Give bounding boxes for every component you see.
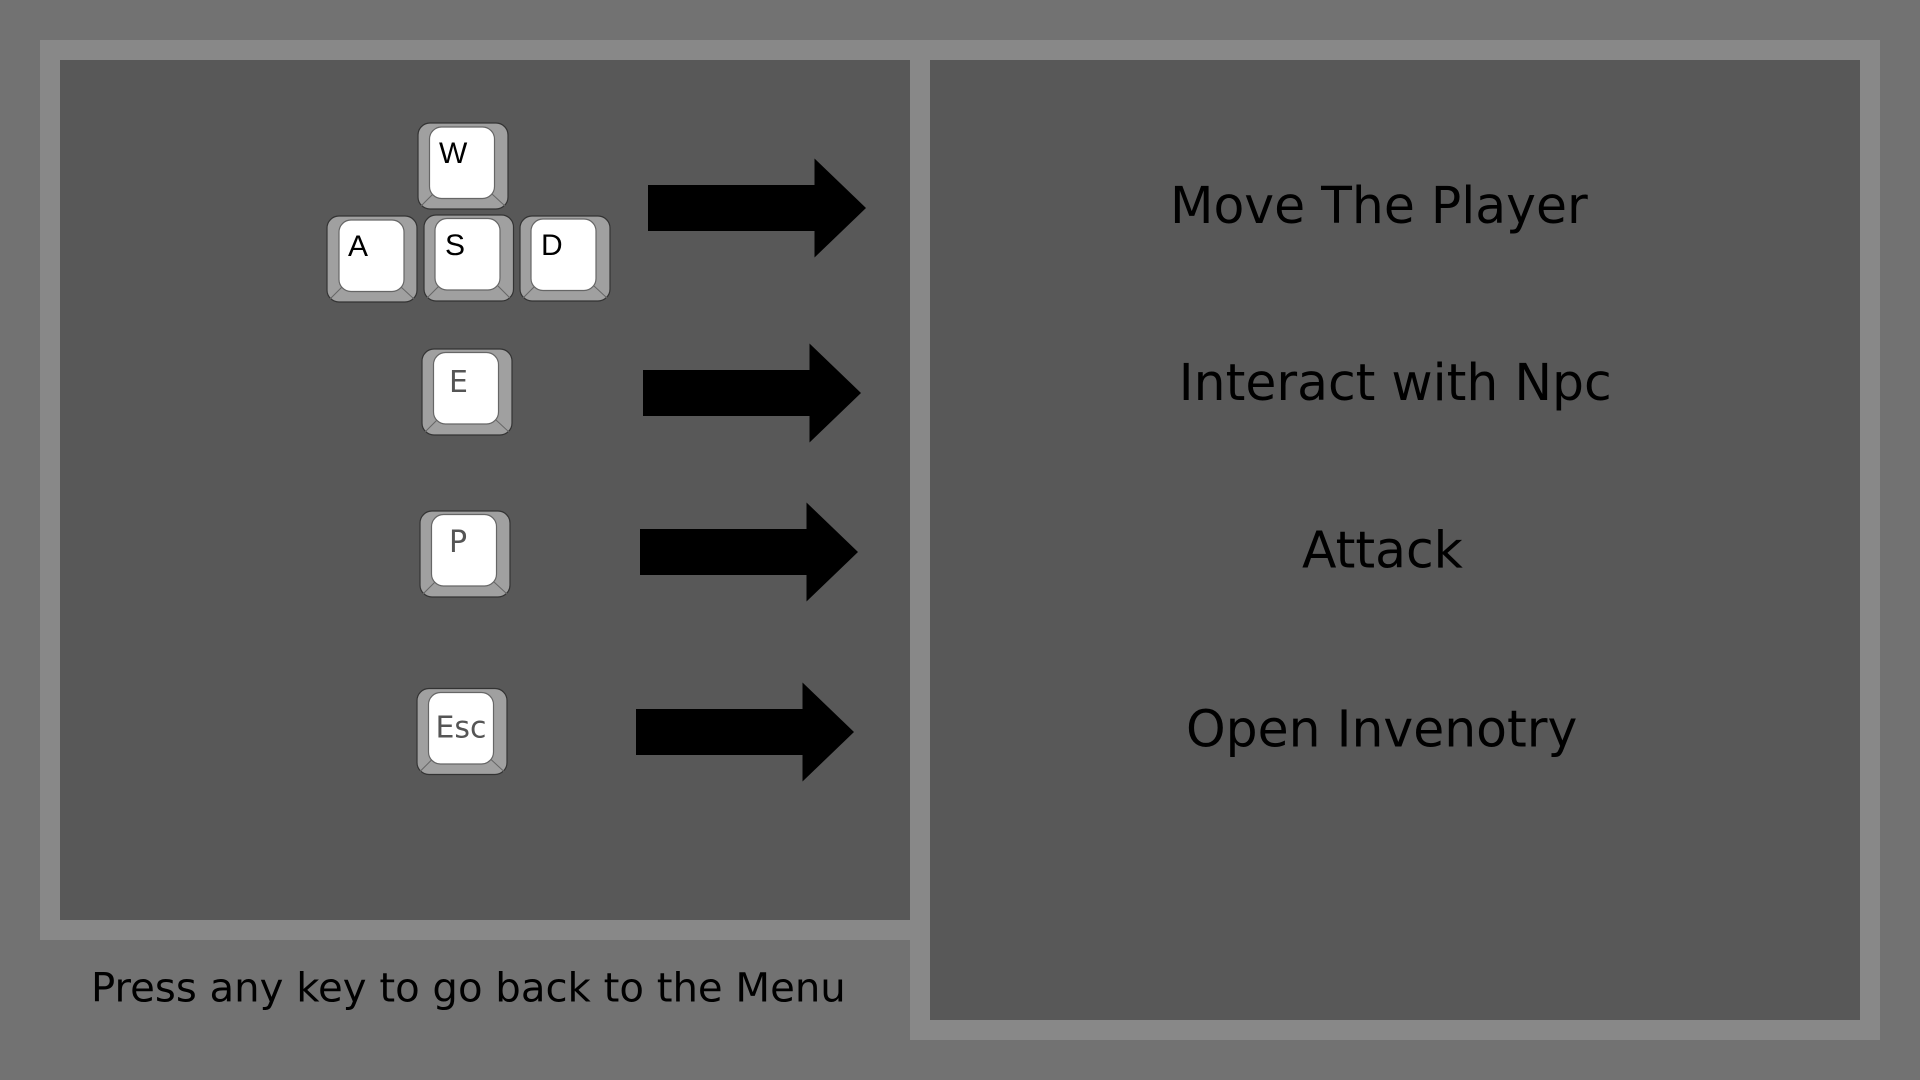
key: D: D xyxy=(541,229,563,262)
panel: actions frame xyxy=(910,40,1880,1040)
panel: keys frame xyxy=(40,40,910,940)
label: Interact with Npc: Interact with Npc xyxy=(1179,353,1612,412)
panel: actions background xyxy=(930,60,1860,1020)
key: W xyxy=(418,123,508,209)
arrow: Esc to Open Invenotry xyxy=(636,682,854,782)
key: P xyxy=(420,511,510,597)
key: E: E xyxy=(449,365,468,400)
label: Move The Player: Move The Player xyxy=(1170,176,1588,235)
panel: keys background xyxy=(60,60,910,920)
key: A: A xyxy=(348,230,368,263)
arrow: WASD to Move The Player xyxy=(648,158,866,258)
hint text: Press any key to go back to the Menu xyxy=(91,966,846,1012)
key: W: W xyxy=(439,137,468,170)
key: E xyxy=(422,349,512,435)
key: P: P xyxy=(449,525,467,560)
key: S: S xyxy=(445,229,465,262)
arrow: P to Attack xyxy=(640,502,858,602)
key: Esc xyxy=(417,688,507,774)
label: Open Invenotry: Open Invenotry xyxy=(1186,700,1577,758)
key: S xyxy=(424,215,514,301)
arrow: E to Interact with Npc xyxy=(643,344,861,442)
key: A xyxy=(327,216,417,302)
key: D xyxy=(520,216,610,301)
label: Attack: Attack xyxy=(1302,520,1464,580)
key: Esc: Esc xyxy=(436,710,486,746)
